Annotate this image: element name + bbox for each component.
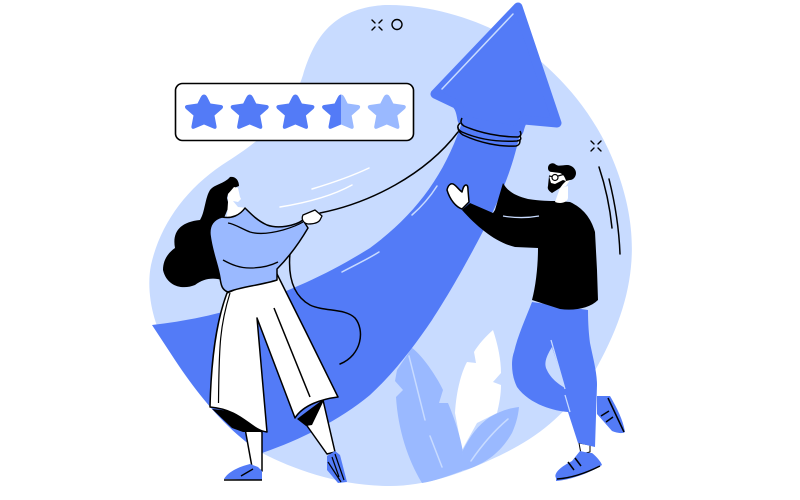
hair (163, 177, 239, 287)
leaf veins (409, 356, 508, 467)
rope (290, 132, 458, 364)
right shoe (327, 451, 347, 483)
legs (244, 400, 335, 471)
star 3 (276, 94, 314, 129)
rating box (176, 84, 414, 140)
hand (302, 210, 322, 224)
arrow highlights (342, 14, 513, 272)
arrow head (435, 7, 557, 131)
star 5 (368, 94, 406, 129)
trouser highlights (551, 340, 570, 412)
face (550, 172, 570, 190)
sweater (462, 183, 598, 310)
large left leaf (395, 348, 463, 483)
star 2 (231, 94, 269, 129)
sweater folds (223, 222, 303, 268)
glasses (549, 174, 565, 180)
skirt folds (218, 293, 230, 403)
woman (163, 177, 347, 483)
motion lines (599, 167, 620, 254)
sweater highlight (503, 216, 539, 218)
white leaf (455, 330, 501, 450)
beard (548, 176, 566, 193)
sparkle and circle top (372, 20, 402, 30)
skirt (210, 272, 338, 432)
skirt shadow (212, 398, 325, 432)
rope coils (458, 118, 521, 146)
hair (548, 163, 576, 181)
hand (447, 184, 469, 209)
back foot (597, 396, 625, 433)
leaves (395, 330, 519, 483)
arrow shaft band (152, 122, 520, 453)
trouser gap (545, 347, 565, 388)
sweater (210, 208, 308, 292)
neck (555, 186, 568, 203)
face and neck (227, 187, 247, 217)
star 4 half filled (322, 94, 360, 129)
left shoe (224, 464, 262, 480)
front shoe (555, 451, 602, 481)
rating frame (176, 84, 414, 140)
background blob (149, 5, 632, 486)
arrow (152, 7, 557, 453)
star 1 (185, 94, 223, 129)
sparkle right (591, 141, 601, 151)
man (447, 163, 625, 481)
small right leaf (461, 407, 519, 471)
wind lines (280, 168, 369, 207)
ankle (579, 443, 590, 454)
trousers (512, 302, 597, 447)
